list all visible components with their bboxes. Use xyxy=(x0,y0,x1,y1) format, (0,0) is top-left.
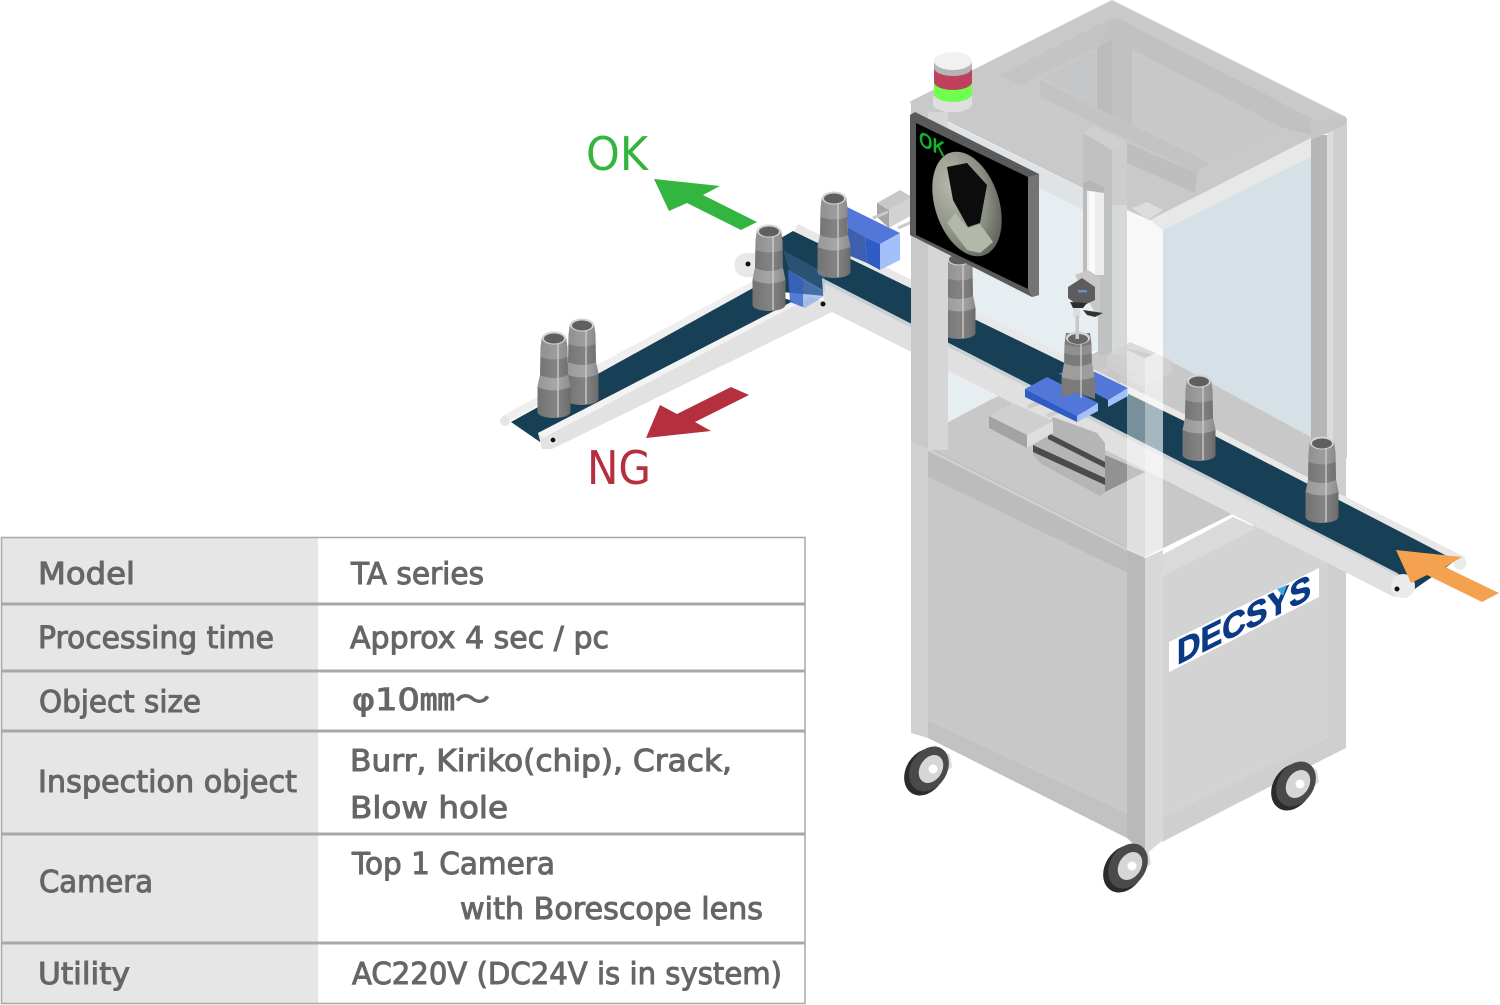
row: object size xyxy=(39,683,490,720)
input arrow xyxy=(1396,550,1499,602)
table lines xyxy=(2,604,805,943)
row: inspection object: Burr, Kiriko(chip), Crack, xyxy=(350,744,732,779)
OK side sorter xyxy=(847,190,912,270)
main conveyor xyxy=(734,224,1466,598)
front rail xyxy=(822,278,1414,598)
gray block xyxy=(877,190,912,210)
centre post translucent xyxy=(1127,350,1145,558)
lower cabinet xyxy=(911,442,1346,855)
right post xyxy=(1311,135,1327,460)
row: utility: AC220V (DC24V is in system) xyxy=(352,957,782,992)
OK label: OK xyxy=(586,127,650,181)
front posts xyxy=(911,102,1163,558)
white strip xyxy=(1127,205,1163,365)
back rail xyxy=(502,281,757,423)
right glass xyxy=(1163,150,1311,437)
left panel xyxy=(928,477,1127,813)
signal tower xyxy=(933,52,972,112)
left translucent rail xyxy=(947,122,1127,232)
specification table xyxy=(2,537,805,1004)
back rail xyxy=(793,224,1465,566)
row: processing time xyxy=(38,621,609,656)
right plate xyxy=(1058,372,1128,400)
rods xyxy=(1028,365,1137,416)
left leg xyxy=(911,442,928,738)
row: camera: Camera xyxy=(39,865,153,900)
row: camera xyxy=(39,847,763,927)
row: model xyxy=(38,557,484,592)
OK on screen: OK xyxy=(919,126,945,162)
camera with borescope xyxy=(1068,270,1103,338)
right panel xyxy=(1162,485,1328,817)
work piece under inspection xyxy=(1062,318,1095,399)
actuator below conveyor xyxy=(989,403,1145,496)
centre leg xyxy=(1127,550,1145,855)
end stub xyxy=(734,253,757,277)
row: processing time: Approx 4 sec / pc xyxy=(350,621,609,656)
row: object size: Object size xyxy=(39,685,201,720)
row: inspection object: Blow hole xyxy=(350,791,508,826)
work pieces on conveyors xyxy=(538,192,1338,523)
row: model: Model xyxy=(38,557,135,592)
row: inspection object: Inspection object xyxy=(38,765,297,800)
machine cabinet back: roof and glass xyxy=(909,0,1347,558)
right leg xyxy=(1328,455,1346,757)
label column xyxy=(2,537,318,1003)
inspection stage xyxy=(1025,342,1172,422)
left glass xyxy=(948,120,1132,425)
rear block xyxy=(1107,342,1172,387)
row: camera: Top 1 Camera xyxy=(351,847,555,882)
belt xyxy=(511,288,805,442)
left post xyxy=(911,102,928,442)
row: utility: Utility xyxy=(38,957,130,992)
row: camera: with Borescope lens xyxy=(460,892,763,927)
translucent NG sorter xyxy=(783,250,825,308)
belt xyxy=(760,231,1452,593)
OK arrow xyxy=(654,179,757,230)
logo plate: DECSYS xyxy=(1177,566,1311,673)
NG arrow xyxy=(646,387,749,438)
row: object size: φ10㎜〜 xyxy=(352,683,490,718)
bracket xyxy=(1033,417,1105,496)
shelf xyxy=(911,345,1346,558)
row: inspection object xyxy=(38,744,732,826)
row: processing time: Processing time xyxy=(38,621,274,656)
upper rail xyxy=(1150,138,1311,230)
casters xyxy=(896,739,1324,900)
row: model: TA series xyxy=(350,557,484,592)
left plate xyxy=(1025,377,1098,416)
NG conveyor xyxy=(500,281,832,449)
table border xyxy=(2,538,805,1004)
shadow xyxy=(1105,455,1145,492)
monitor xyxy=(910,112,1039,297)
block xyxy=(989,403,1053,435)
roof xyxy=(909,0,1346,220)
front rail xyxy=(538,295,832,449)
work piece at sorter xyxy=(752,224,786,311)
camera column xyxy=(1083,126,1127,355)
NG label: NG xyxy=(587,441,651,495)
linear slider xyxy=(1083,180,1104,275)
row: utility xyxy=(38,957,782,992)
inspection image xyxy=(920,143,1014,265)
